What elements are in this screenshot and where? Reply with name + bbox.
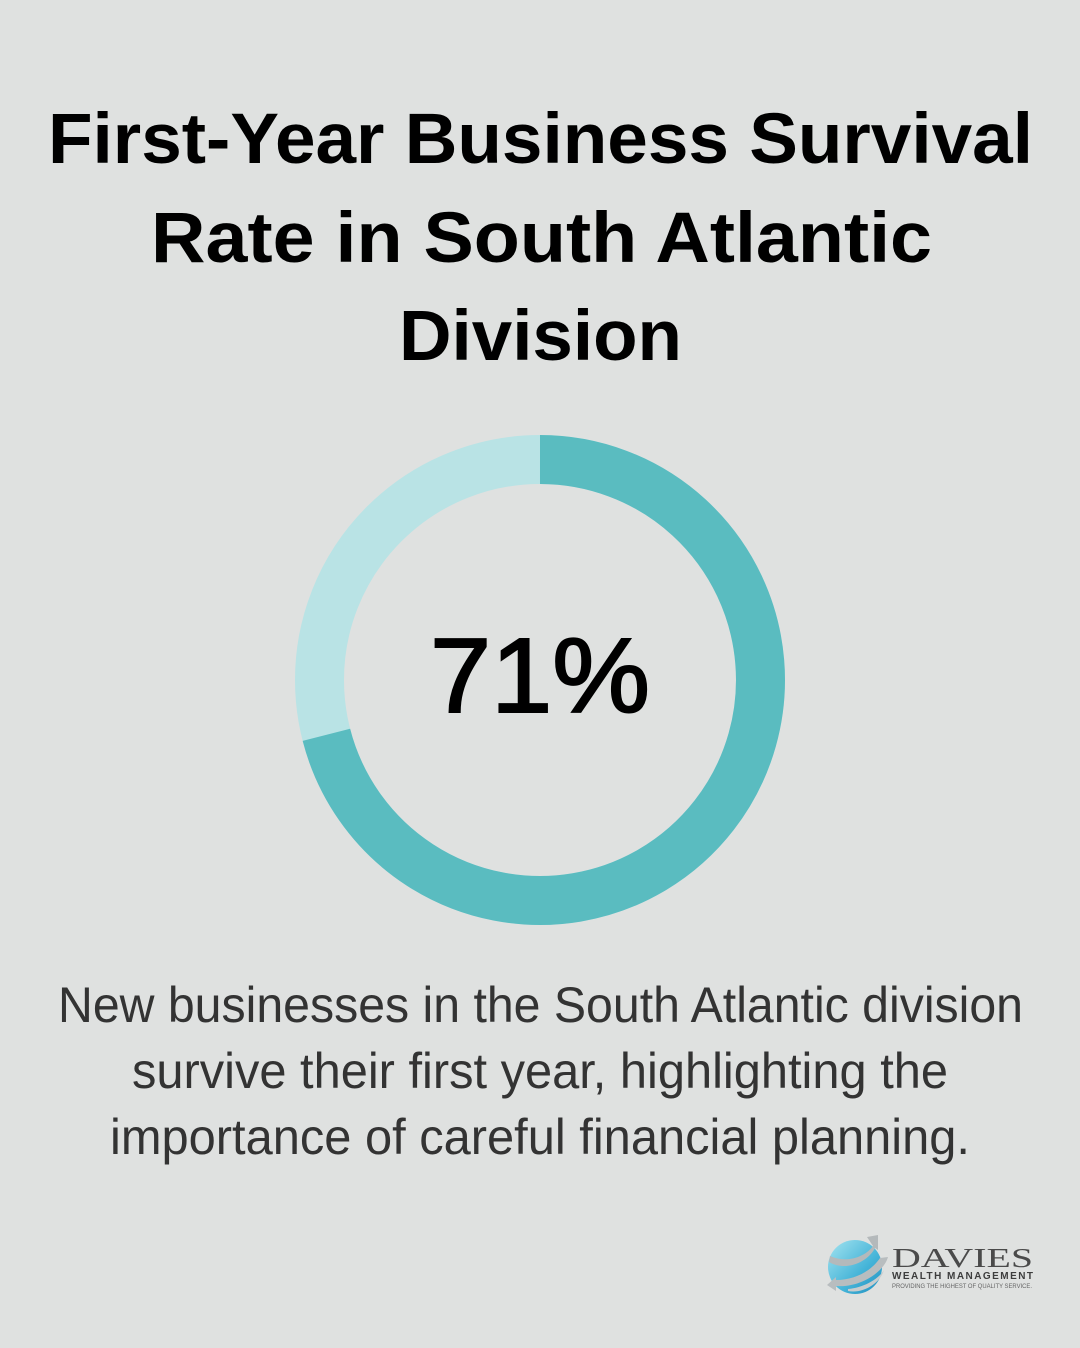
title: Division [399, 297, 682, 376]
logo: Davies Wealth Management [827, 1235, 1033, 1294]
description text: survive their first year, highlighting the [132, 1043, 948, 1099]
title [48, 100, 1033, 376]
logo tagline: PROVIDING THE HIGHEST OF QUALITY SERVICE. [892, 1283, 1032, 1290]
title: First-Year Business Survival [48, 100, 1033, 179]
donut chart: 71% [320, 460, 760, 900]
title: Rate in South Atlantic [151, 199, 932, 278]
donut value label: 71% [430, 617, 650, 735]
description text: importance of careful financial planning. [110, 1109, 970, 1165]
icon: globe with arrows [827, 1235, 888, 1294]
description text [58, 977, 1023, 1165]
donut value arc [326, 460, 760, 900]
logo wordmark: DAVIES [892, 1243, 1033, 1273]
description text: New businesses in the South Atlantic division [58, 977, 1023, 1033]
donut track [320, 460, 760, 900]
logo subtitle: WEALTH MANAGEMENT [892, 1271, 1033, 1282]
